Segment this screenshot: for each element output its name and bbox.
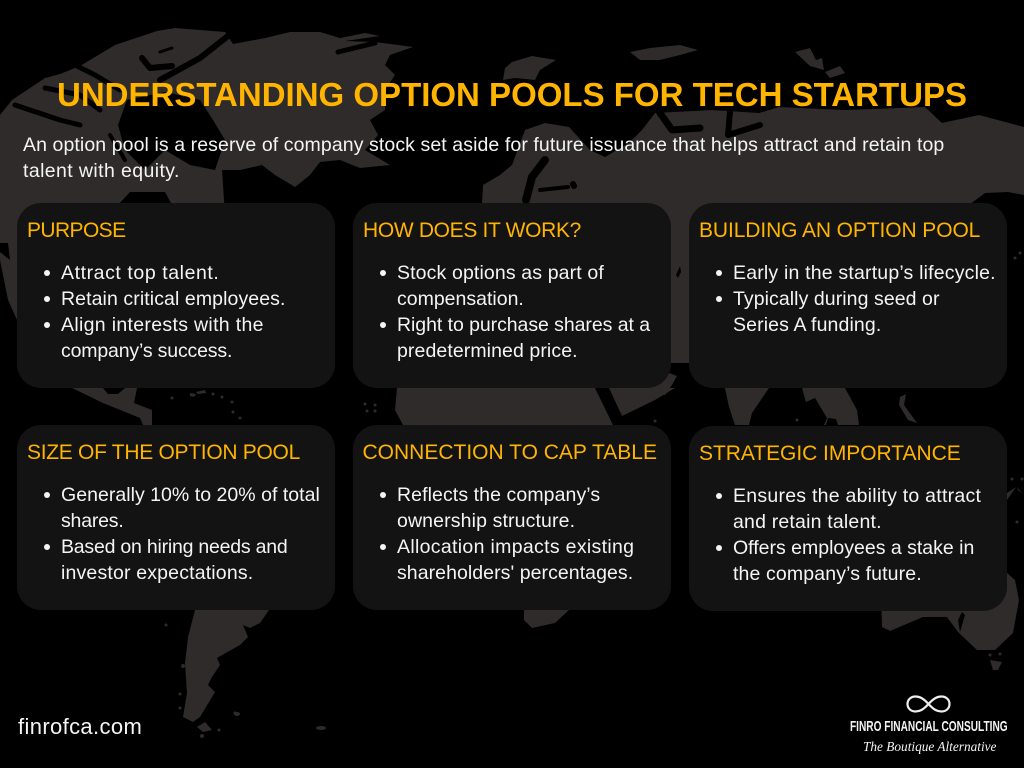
bullet list: how does it work: [380, 262, 650, 362]
panel: connection to cap table: [353, 425, 671, 610]
heading: how does it work: HOW DOES IT WORK?: [363, 219, 581, 242]
panel: strategic importance: [689, 426, 1007, 611]
intro text: talent with equity.: [23, 160, 180, 182]
bullet list: size of the option pool: investor expectations.: [61, 562, 253, 584]
bullet list: connection to cap table: Allocation impacts existing: [397, 536, 634, 558]
bullet list: how does it work: predetermined price.: [397, 340, 578, 362]
heading: strategic importance: STRATEGIC IMPORTANCE: [699, 442, 961, 465]
panel: how does it work: [353, 203, 671, 388]
bullet list: connection to cap table: shareholders' percentages.: [397, 562, 633, 584]
bullet list: building an option pool: Series A funding.: [733, 314, 881, 336]
intro text: [23, 134, 944, 182]
bullet list: purpose: [44, 262, 286, 362]
company name: FINRO FINANCIAL CONSULTING: [850, 718, 1008, 735]
bullet list: purpose: company’s success.: [61, 340, 232, 362]
bullet list: purpose: Retain critical employees.: [61, 288, 286, 310]
intro text: An option pool is a reserve of company stock set aside for future issuance that helps attract and retain top: [23, 134, 944, 156]
logo: Finro Financial Consulting: [850, 695, 1008, 754]
bullet list: connection to cap table: Reflects the company’s: [397, 484, 600, 506]
bullet list: size of the option pool: Based on hiring needs and: [61, 536, 288, 558]
title: UNDERSTANDING OPTION POOLS FOR TECH STARTUPS: [57, 76, 967, 113]
bullet list: building an option pool: Typically during seed or: [733, 288, 940, 310]
panel: purpose: [17, 203, 335, 388]
bullet list: purpose: Attract top talent.: [61, 262, 219, 284]
bullet list: connection to cap table: ownership structure.: [397, 510, 575, 532]
bullet list: connection to cap table: [380, 484, 634, 584]
tagline: The Boutique Alternative: [863, 739, 996, 754]
bullet list: size of the option pool: shares.: [61, 510, 124, 532]
bullet list: how does it work: Stock options as part of: [397, 262, 604, 284]
bullet list: purpose: Align interests with the: [61, 314, 264, 336]
bullet list: how does it work: compensation.: [397, 288, 524, 310]
panel: size of the option pool: [17, 425, 335, 610]
panel: building an option pool: [689, 203, 1007, 388]
bullet list: strategic importance: Ensures the ability to attract: [733, 485, 981, 507]
bullet list: strategic importance: [716, 485, 981, 585]
bullet list: how does it work: Right to purchase shares at a: [397, 314, 650, 336]
heading: purpose: PURPOSE: [27, 219, 126, 242]
heading: size of the option pool: SIZE OF THE OPTION POOL: [27, 441, 300, 464]
bullet list: strategic importance: Offers employees a stake in: [733, 537, 974, 559]
heading: building an option pool: BUILDING AN OPTION POOL: [699, 219, 980, 242]
bullet list: building an option pool: Early in the startup’s lifecycle.: [733, 262, 996, 284]
bullet list: size of the option pool: [44, 484, 320, 584]
bullet list: strategic importance: and retain talent.: [733, 511, 882, 533]
bullet list: strategic importance: the company’s future.: [733, 563, 922, 585]
bullet list: building an option pool: [716, 262, 996, 336]
icon: infinity symbol: [906, 695, 951, 713]
heading: connection to cap table: CONNECTION TO CAP TABLE: [362, 441, 657, 464]
bullet list: size of the option pool: Generally 10% to 20% of total: [61, 484, 320, 506]
website url: finrofca.com: [18, 714, 142, 739]
